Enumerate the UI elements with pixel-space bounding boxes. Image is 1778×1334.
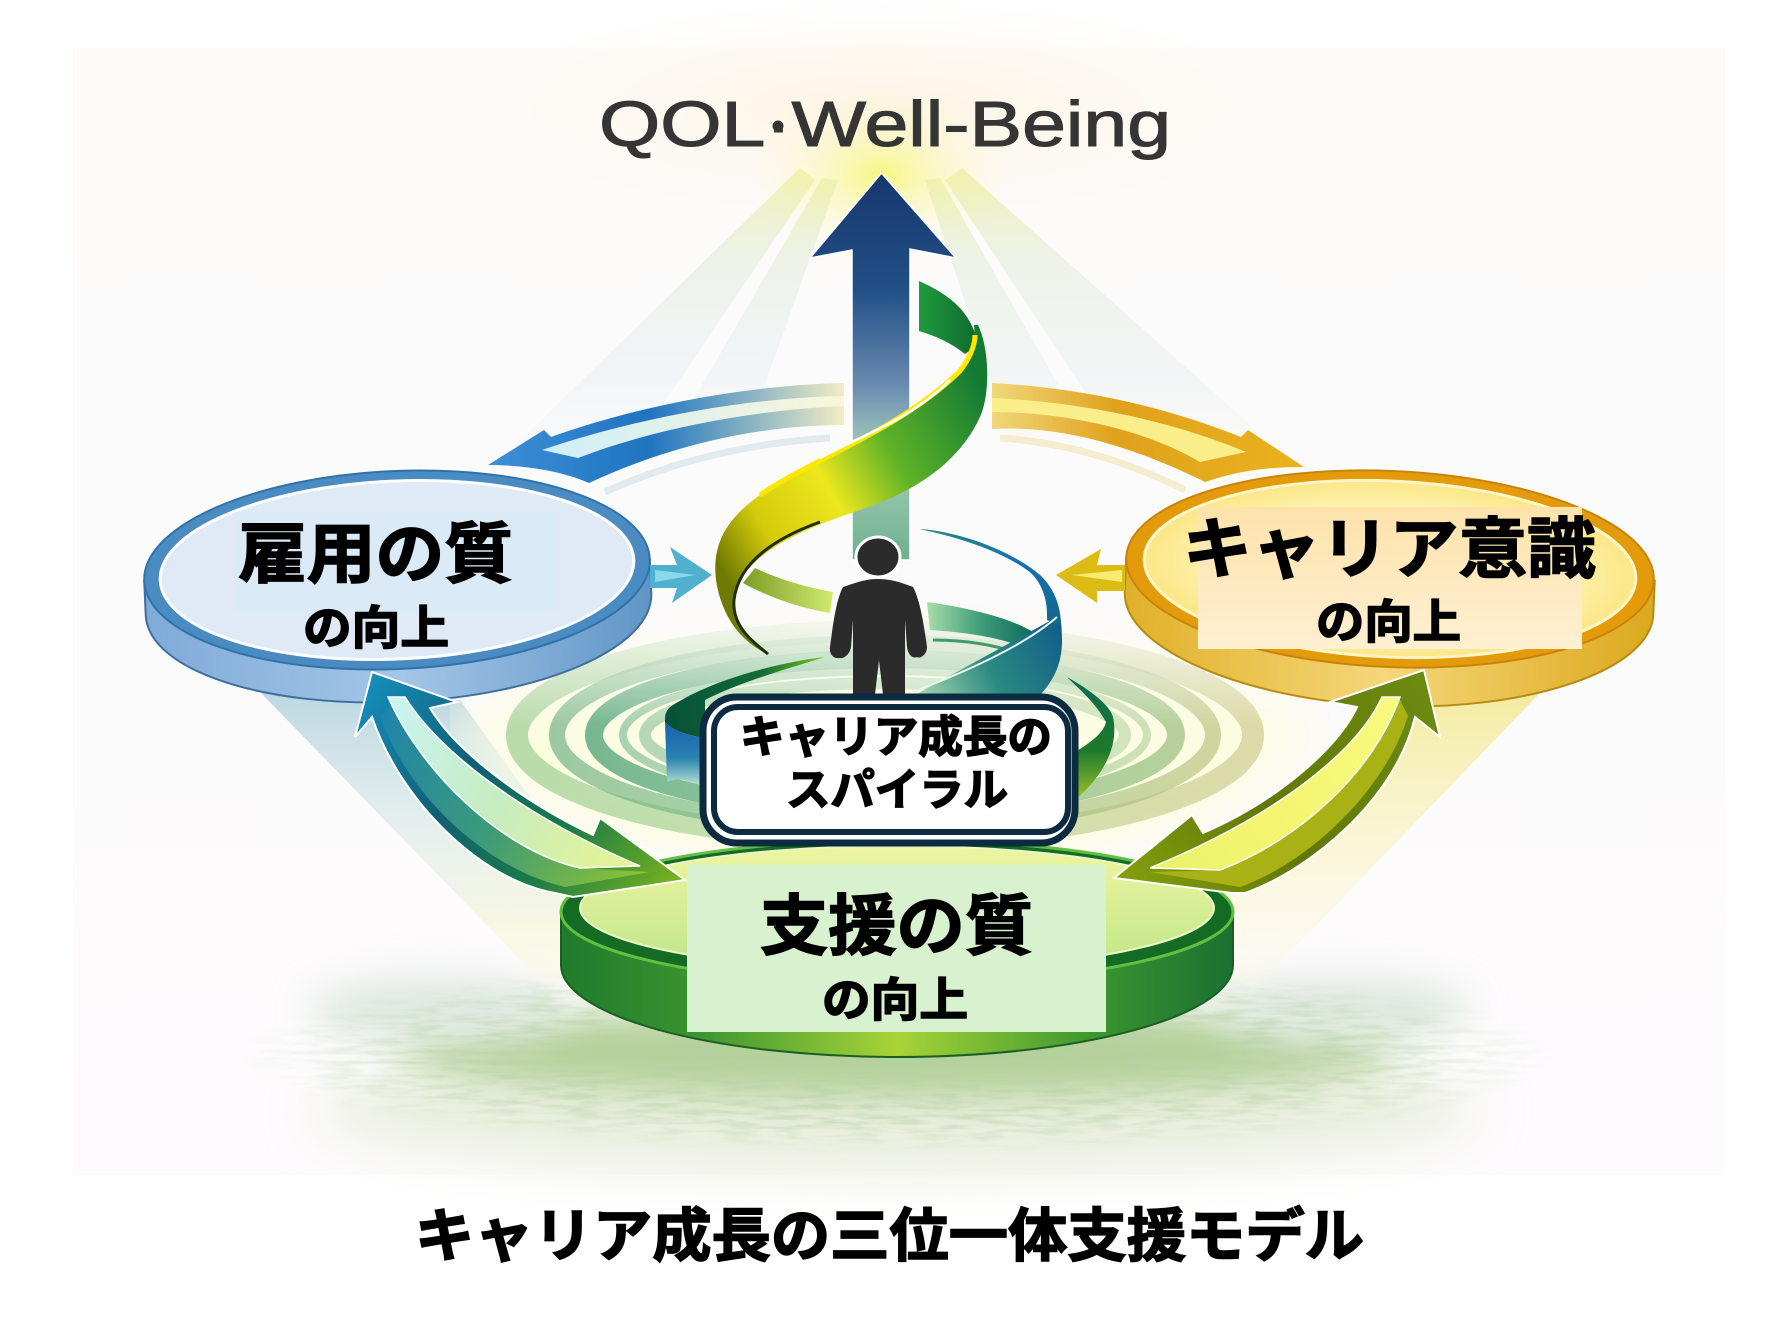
main spiral ribbon xyxy=(715,281,987,655)
arrow: small yellow arrow to spiral xyxy=(1056,549,1125,603)
ribbon: lower spiral back band xyxy=(743,568,1033,652)
arrow: blue arc to employment quality xyxy=(488,383,844,492)
subheading: の向上 xyxy=(303,602,449,654)
disc body xyxy=(140,460,656,713)
title: QOL Well-Being: QOL·Well-Being xyxy=(599,88,1171,160)
concentric spiral rings xyxy=(450,620,1314,854)
light rays from the goal xyxy=(261,0,1540,990)
central up arrow xyxy=(810,173,956,560)
ribbon: lower spiral base right xyxy=(1067,677,1114,800)
callout: キャリア成長のスパイラル xyxy=(703,697,1075,843)
arrow: two-way right awareness and support xyxy=(1114,670,1440,893)
ribbon: lower spiral base left xyxy=(665,657,825,788)
callout: キャリア成長のスパイラル: スパイラル xyxy=(786,766,1008,815)
caption title: キャリア成長の三位一体支援モデル xyxy=(415,1204,1364,1269)
panel: キャリア意識 disc xyxy=(1120,460,1659,717)
heading: 支援の質 xyxy=(760,889,1033,963)
heading: 雇用の質 xyxy=(238,517,513,591)
arrow: two-way left employment and support xyxy=(355,672,685,897)
disc rim xyxy=(561,840,1233,984)
subheading: の向上 xyxy=(822,974,968,1026)
arrow: orange arc to career awareness xyxy=(992,383,1304,490)
callout: キャリア成長のスパイラル: キャリア成長の xyxy=(740,713,1052,762)
person figure xyxy=(830,537,927,703)
label background xyxy=(687,865,1106,1032)
arrow: small blue arrow to spiral xyxy=(650,547,712,603)
panel: 雇用の質 disc xyxy=(140,460,656,713)
ribbon: blue arc behind person xyxy=(913,529,1062,702)
label background xyxy=(1198,507,1582,649)
grass ground xyxy=(279,966,1515,1190)
disc side xyxy=(561,912,1233,1057)
disc surface xyxy=(580,846,1214,970)
subheading: の向上 xyxy=(1316,596,1461,648)
background panel xyxy=(73,48,1725,1175)
label background xyxy=(235,512,558,611)
heading: キャリア意識 xyxy=(1183,512,1596,586)
disc body xyxy=(1120,460,1659,717)
panel: 支援の質 disc xyxy=(561,840,1233,1057)
